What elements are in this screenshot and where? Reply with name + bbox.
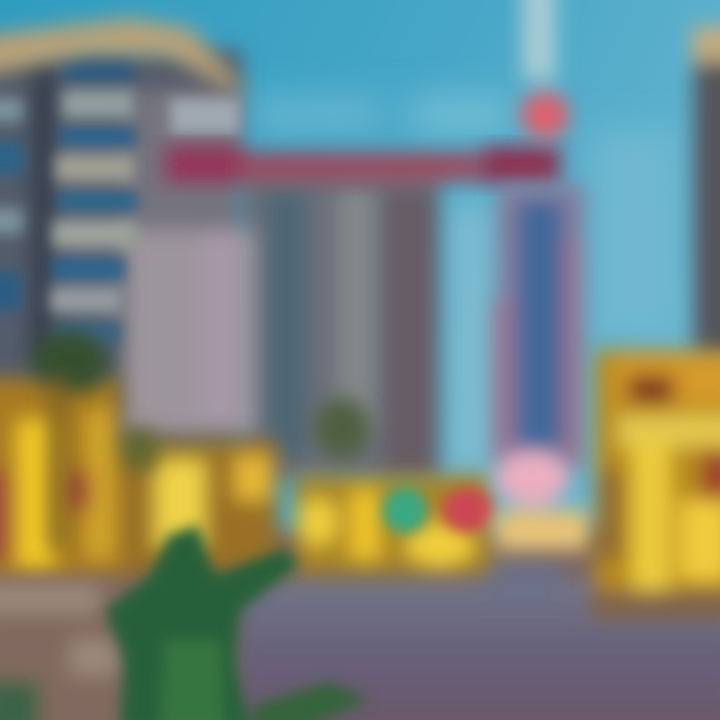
small palm trees [32,330,370,550]
sky glow behind tower [250,100,680,480]
red banner band [165,146,560,184]
left building roof [0,18,248,92]
ground base [0,530,720,720]
tower antenna and red beacon [521,0,569,139]
left building windows [0,58,240,344]
left yellow storefronts [0,378,278,583]
center yellow storefronts [295,475,490,573]
foreground palm tree [105,525,370,720]
pink glow [494,450,590,550]
tower [492,185,584,470]
left ground [0,575,120,720]
road [240,560,720,720]
right building [692,26,720,360]
green and red signs [383,487,494,533]
left building [0,50,255,450]
central building [240,170,440,480]
right yellow building [590,350,720,620]
